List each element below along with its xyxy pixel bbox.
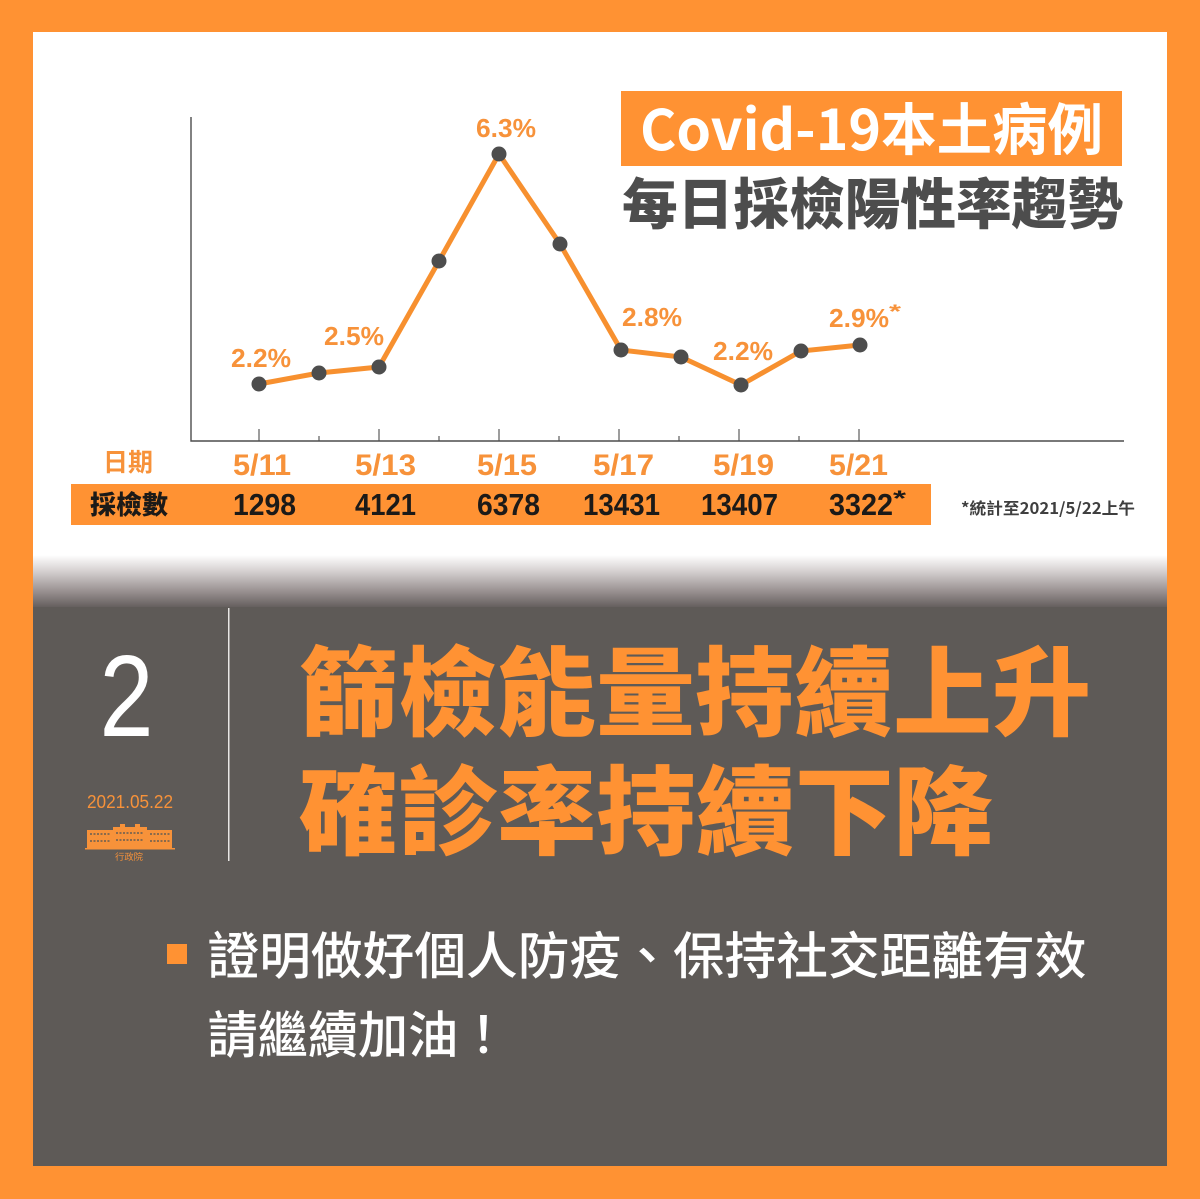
table row: test counts: 採檢數 (90, 485, 168, 522)
table row: test counts: * (893, 486, 907, 511)
subtitle: daily positivity trend: 每日採檢陽性率趨勢 (622, 160, 1123, 240)
data labels (231, 113, 902, 373)
table row: test counts: 1298 (233, 487, 296, 522)
panel: dark message area (33, 607, 1167, 1166)
data points (252, 146, 868, 392)
data labels: 2.9% (829, 303, 889, 333)
date row: 5/11 (233, 449, 291, 482)
date row: 5/17 (593, 449, 654, 482)
bullet text (208, 915, 1086, 1068)
axes (191, 117, 1124, 441)
title: Covid-19 banner: Covid-19本土病例 (640, 86, 1103, 167)
date row: 5/19 (713, 449, 774, 482)
table row: test counts: 3322 (829, 487, 893, 522)
line chart: positivity rate (191, 113, 1124, 441)
data labels: 6.3% (476, 113, 536, 143)
date row: 日期 (103, 443, 153, 479)
data labels: * (889, 302, 902, 323)
table row: test counts: 6378 (477, 487, 540, 522)
table row: test counts (71, 484, 931, 525)
table row: test counts: 13431 (583, 487, 660, 522)
trend line (259, 154, 860, 385)
date row: 5/15 (477, 449, 537, 482)
bullet text: 證明做好個人防疫、保持社交距離有效 (208, 915, 1086, 989)
icon: Executive Yuan building (85, 824, 175, 863)
gradient band (33, 555, 1167, 608)
date stamp: 2021.05.22 (87, 792, 173, 812)
bullet marker (167, 944, 187, 964)
data labels: 2.8% (622, 302, 682, 332)
icon: Executive Yuan building: 行政院 (115, 850, 143, 863)
data labels: 2.5% (324, 321, 384, 351)
footnote: *統計至2021/5/22上午 (961, 495, 1135, 519)
bullet text: 請繼續加油！ (208, 994, 508, 1068)
date row: 5/21 (829, 449, 888, 482)
headline (299, 615, 1091, 875)
data labels: 2.2% (713, 336, 773, 366)
table row: test counts: 13407 (701, 487, 778, 522)
date row: 5/13 (355, 449, 416, 482)
headline: 確診率持續下降 (299, 734, 993, 875)
data labels: 2.2% (231, 343, 291, 373)
panel: white chart area (33, 32, 1167, 556)
vertical divider (228, 608, 230, 861)
headline: 篩檢能量持續上升 (299, 615, 1091, 756)
number 2: 2 (100, 631, 154, 761)
date row (103, 443, 888, 482)
table row: test counts: 4121 (355, 487, 416, 522)
